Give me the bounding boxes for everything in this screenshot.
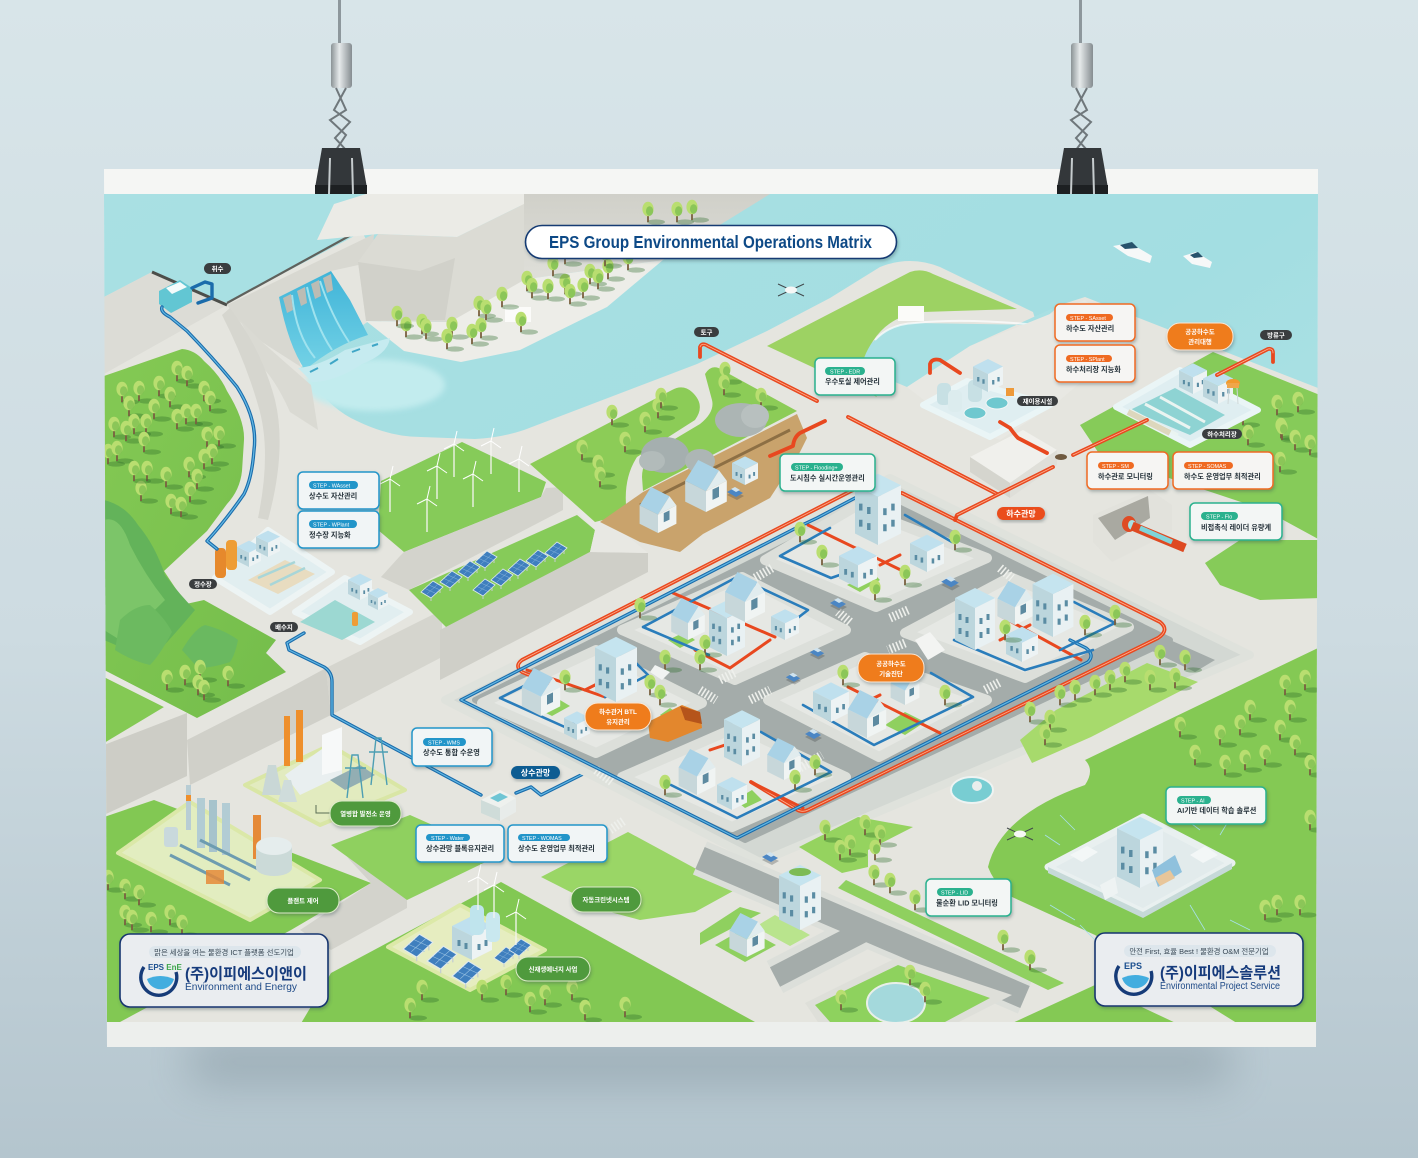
orange pill: 하수관거 BTL: 하수관거 BTL [599, 707, 637, 716]
orange pill: 하수관거 BTL: 유지관리 [606, 717, 630, 726]
card: LID: STEP - LID [941, 890, 968, 896]
red sewer main [518, 344, 1273, 811]
logo mark: EPS EnE [148, 963, 182, 972]
company name: (주)이피에스이앤이 [185, 965, 307, 983]
water tank box [481, 790, 516, 821]
tag: 취수: 취수 [212, 264, 223, 273]
company name: Environment and Energy [185, 982, 297, 993]
wedge green [331, 815, 500, 900]
green pill: 신재생에너지 [516, 957, 590, 981]
green pill: 자동크린넷 [571, 887, 641, 912]
tag: 취수 [204, 263, 231, 274]
card: WPlant [298, 511, 379, 548]
wind turbines [380, 428, 529, 532]
spillway water [279, 271, 390, 382]
card: SAsset: STEP - SAsset [1070, 316, 1106, 322]
tag: 배수지 [270, 622, 298, 632]
card: WOMAS [508, 825, 607, 862]
green pill: 신재생에너지: 신재생에너지 사업 [529, 964, 578, 974]
card: SPlant [1055, 345, 1135, 382]
solar panels [421, 542, 567, 601]
wastewater plant [1116, 363, 1258, 445]
concrete road near intake [104, 272, 227, 374]
company name [185, 965, 307, 993]
green forest and hills [104, 349, 286, 718]
upper-right trees [1242, 392, 1318, 475]
tag: 하수처리장: 하수처리장 [1207, 430, 1237, 438]
logo mark: EPS [1124, 961, 1142, 971]
tag: 재이용시설 [1017, 396, 1058, 406]
LID green strip [838, 880, 1064, 990]
renewable site [388, 864, 545, 990]
card: Water [416, 825, 504, 862]
card: SM [1087, 452, 1168, 489]
bay [864, 305, 1060, 387]
green pill: 열병합 [330, 801, 401, 826]
tag: 재이용시설: 재이용시설 [1023, 396, 1052, 406]
hanging clip left [315, 0, 367, 194]
poster cast shadow [190, 1042, 1230, 1082]
inner red sewer pipes [527, 525, 1081, 808]
dam rock massif [317, 194, 770, 362]
green pill: 자동크린넷: 자동크린넷시스템 [582, 895, 630, 904]
card: WPlant: STEP - WPlant [313, 522, 350, 528]
blue water main [461, 498, 1091, 838]
pipe: intake [152, 272, 255, 549]
block 4 [482, 650, 702, 753]
green-area trees [102, 645, 1327, 1023]
orange pill: 기술진단: 기술진단 [879, 669, 903, 678]
company slogan [1124, 945, 1276, 957]
small park [799, 817, 913, 873]
network pill: 하수관망: 하수관망 [1006, 508, 1036, 518]
card: AI: AI기반 데이터 학습 솔루션 [1177, 806, 1256, 815]
poster sheet [104, 169, 1318, 1047]
card: WAsset: STEP - WAsset [313, 483, 351, 489]
AI data centre pad [1045, 810, 1250, 945]
block 1 [765, 507, 987, 607]
block 6 [622, 727, 846, 827]
drone over field [1007, 828, 1033, 840]
isometric map artwork [100, 190, 1327, 1030]
city street trees [559, 522, 1132, 798]
card: WOMAS: STEP - WOMAS [522, 836, 562, 842]
drone over water [778, 284, 804, 296]
card: LID: 물순환 LID 모니터링 [936, 898, 998, 908]
lower-left green strip [104, 677, 164, 743]
card: LID [926, 879, 1011, 916]
green pill: 플랜트 제어: 플랜트 제어 [287, 896, 319, 905]
lower park [805, 957, 1012, 1025]
house lot [700, 865, 821, 962]
plant terrace green [104, 800, 371, 1022]
solar terrace wall [440, 552, 648, 680]
city buildings [522, 474, 1073, 810]
water treatment terrace pads [215, 530, 410, 642]
reuse facility [923, 359, 1050, 437]
hanging clip right [1057, 0, 1108, 194]
dam slope facets [222, 308, 318, 520]
flooded ground [600, 414, 807, 552]
card: AI [1166, 787, 1266, 824]
card: WMS: 상수도 통합 수운영 [423, 748, 480, 757]
pipe: treatment to plant to tank [287, 633, 591, 795]
card: WAsset [298, 472, 379, 509]
hills [104, 500, 238, 668]
card: EDR [815, 358, 895, 395]
wind field [378, 442, 546, 552]
company name [1160, 964, 1281, 992]
right upper green [1080, 352, 1320, 540]
solar field [409, 515, 595, 628]
company name: Environmental Project Service [1160, 981, 1280, 992]
company slogan: 맑은 세상을 여는 물환경 ICT 플랫폼 선도기업 [154, 948, 294, 957]
logo mark [1116, 961, 1152, 994]
inner blue loops [500, 515, 1115, 818]
card: EDR: 우수토실 제어관리 [825, 377, 880, 386]
orange pill: 기술진단 [858, 654, 924, 682]
card: WPlant: 정수장 지능화 [309, 530, 351, 540]
block 3 [905, 577, 1129, 678]
network pill: 상수관망: 상수관망 [521, 768, 551, 778]
logo panel: EPS Solution [1095, 933, 1303, 1006]
card: WMS [412, 728, 492, 766]
card: AI: STEP - AI [1181, 798, 1205, 804]
green pill: 플랜트 제어 [267, 888, 339, 913]
orange pill: 공공하수도 관리대행: 공공하수도 [1185, 327, 1215, 336]
flood-side park [530, 362, 797, 522]
card: SPlant: 하수처리장 지능화 [1066, 365, 1121, 374]
logo mark [141, 963, 182, 995]
fountain [951, 777, 993, 803]
tag: 정수장: 정수장 [194, 580, 212, 588]
road details: manhole [1055, 454, 1067, 460]
tag: 정수장 [189, 579, 217, 589]
card: Flo: 비접촉식 레이더 유량계 [1201, 523, 1272, 532]
auto clean-net green [541, 832, 735, 920]
title: EPS Group Environmental Operations Matrix [549, 232, 872, 252]
left cliff block [104, 713, 187, 815]
tag: 방류구: 방류구 [1267, 330, 1285, 340]
card: SOMAS [1173, 452, 1273, 489]
dam wall [227, 234, 374, 367]
white sluice on peninsula [898, 306, 924, 321]
company slogan: 안전 First, 효율 Best ! 물환경 O&M 전문기업 [1129, 947, 1269, 956]
card: SAsset: 하수도 자산관리 [1066, 324, 1114, 333]
orange pill: 공공하수도 관리대행 [1167, 323, 1233, 350]
main land mass [104, 232, 1320, 1025]
orange pill: 기술진단: 공공하수도 [876, 659, 906, 668]
company name: (주)이피에스솔루션 [1160, 964, 1281, 982]
card: SOMAS: 하수도 운영업무 최적관리 [1184, 472, 1261, 481]
vehicles [648, 576, 960, 865]
block 2 [622, 577, 846, 680]
cliff under treatment terrace [187, 668, 331, 785]
trees on rock terrace [391, 200, 709, 352]
card: WAsset: 상수도 자산관리 [309, 492, 357, 500]
crosswalks [596, 568, 1012, 830]
card: WMS: STEP - WMS [428, 740, 460, 746]
city road [475, 498, 1170, 840]
orange pill: 하수관거 BTL [585, 703, 651, 730]
card: Flooding [780, 454, 875, 491]
card: SOMAS: STEP - SOMAS [1188, 464, 1227, 470]
tag: 토구: 토구 [701, 328, 712, 336]
reuse terraces [907, 314, 1056, 498]
foam glow on river [305, 359, 445, 411]
card: SPlant: STEP - SPlant [1070, 357, 1105, 363]
power plant [245, 710, 405, 825]
big right green [988, 647, 1320, 1025]
chemical plant [118, 785, 320, 920]
block 5 [768, 657, 987, 757]
orange pill: 공공하수도 관리대행: 관리대행 [1188, 337, 1212, 346]
tag: 방류구 [1260, 330, 1292, 340]
title [526, 226, 896, 258]
city sidewalk plate [445, 478, 1250, 862]
storm clouds [639, 403, 769, 473]
card: SAsset [1055, 304, 1135, 341]
card: Flo [1190, 503, 1282, 540]
forest trees [102, 361, 245, 703]
company slogan [149, 946, 301, 958]
card: EDR: STEP - EDR [830, 369, 860, 375]
network pill: 상수관망 [511, 766, 560, 779]
renewable green [300, 882, 755, 1025]
lower road [700, 858, 1025, 997]
card: Flooding: STEP - Flooding+ [795, 465, 838, 471]
peninsula green [767, 270, 1017, 397]
tag: 배수지: 배수지 [275, 622, 293, 632]
upper park [1020, 663, 1198, 763]
block green patches [540, 572, 925, 808]
wind terrace wall [381, 487, 563, 590]
tunnel outfall [1098, 496, 1187, 552]
boats [1113, 242, 1212, 268]
card: SM: STEP - SM [1102, 464, 1129, 470]
tag: 하수처리장 [1202, 429, 1242, 439]
logo panel: EPS EnE [120, 934, 328, 1007]
card: Water: STEP - Water [431, 836, 464, 842]
water [100, 190, 1325, 1030]
green pill: 열병합: 열병합 발전소 운영 [340, 809, 391, 818]
flooded houses [640, 456, 758, 533]
card: Flooding: 도시침수 실시간운영관리 [790, 474, 865, 482]
card: Flo: STEP - Flo [1206, 514, 1232, 520]
tag: 토구 [694, 327, 719, 337]
network pill: 하수관망 [997, 507, 1045, 520]
white box by rock [505, 307, 531, 322]
plant terrace wall [300, 857, 407, 950]
card: Water: 상수관망 블록유지관리 [426, 844, 494, 853]
card: SM: 하수관로 모니터링 [1098, 472, 1153, 481]
card: WOMAS: 상수도 운영업무 최적관리 [518, 844, 595, 853]
